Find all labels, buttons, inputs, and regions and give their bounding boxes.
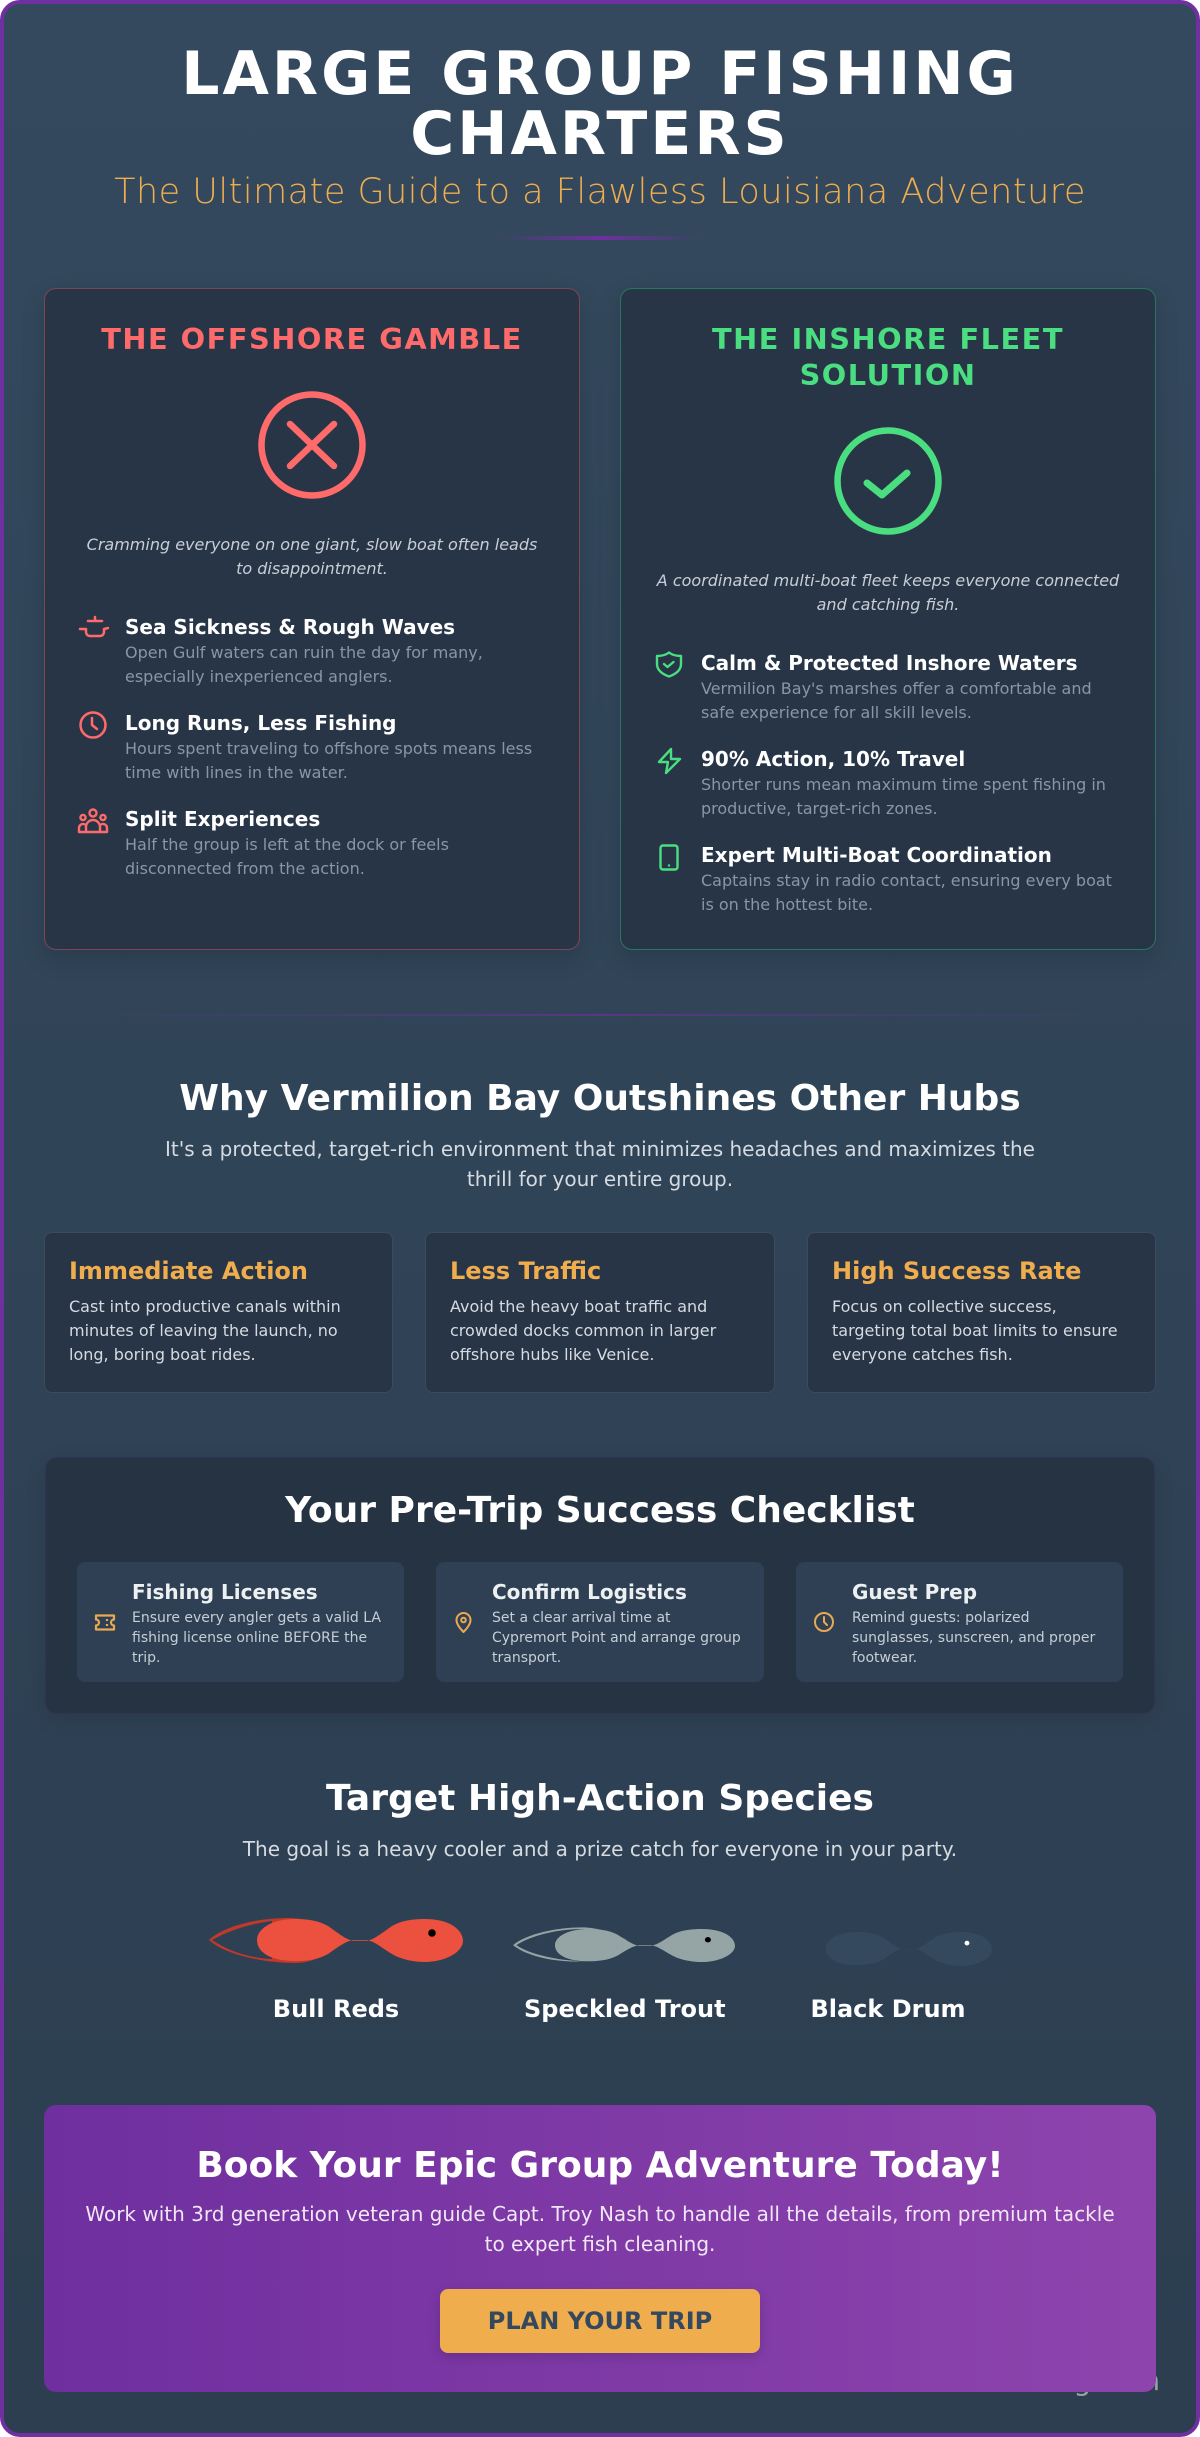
item: calm waters [656, 651, 1092, 722]
item text [701, 870, 1112, 914]
item text [125, 834, 449, 878]
benefit card: high success rate [807, 1232, 1156, 1393]
section intro: It's a protected, target-rich environment that minimizes headaches and maximizes the [165, 1137, 1035, 1161]
panel: call to action [44, 2105, 1156, 2392]
benefit text: long, boring boat rides. [69, 1345, 256, 1364]
intro text: A coordinated multi-boat fleet keeps everyone connected [657, 571, 1119, 590]
checklist text: footwear. [852, 1650, 917, 1666]
benefit text [832, 1297, 1118, 1364]
intro text: and catching fish. [817, 595, 959, 614]
cta text: Work with 3rd generation veteran guide Capt. Troy Nash to handle all the details, from premium tackle [85, 2202, 1115, 2226]
checklist text [132, 1610, 381, 1666]
benefit title: High Success Rate [832, 1257, 1081, 1285]
item text: Captains stay in radio contact, ensuring every boat [701, 870, 1112, 890]
icon: phone [659, 844, 679, 871]
checklist card: logistics [436, 1562, 764, 1682]
checklist card: licenses [77, 1562, 404, 1682]
button [440, 2289, 760, 2353]
panel: checklist [45, 1457, 1155, 1714]
benefit title: Immediate Action [69, 1257, 308, 1285]
title [181, 39, 1019, 169]
item title: Expert Multi-Boat Coordination [701, 843, 1052, 867]
benefit text: Avoid the heavy boat traffic and [450, 1297, 707, 1316]
icon: people [78, 808, 108, 834]
item title: Split Experiences [125, 807, 320, 831]
heading: inshore: THE INSHORE FLEET [712, 322, 1064, 356]
item text [125, 738, 532, 782]
checklist text [852, 1610, 1096, 1666]
item title: Calm & Protected Inshore Waters [701, 651, 1078, 675]
item text: Shorter runs mean maximum time spent fishing in [701, 774, 1106, 794]
item: coordination [659, 843, 1112, 914]
species heading: Target High-Action Species [326, 1778, 874, 1819]
checklist text [492, 1610, 741, 1666]
icon: clock [814, 1612, 834, 1632]
item text: Half the group is left at the dock or feels [125, 834, 449, 854]
item text: productive, target-rich zones. [701, 798, 938, 818]
checklist title: Guest Prep [852, 1580, 977, 1604]
checklist text: trip. [132, 1650, 160, 1666]
item title: Long Runs, Less Fishing [125, 711, 396, 735]
icon: pot [78, 616, 110, 638]
benefit text [69, 1297, 341, 1364]
benefit text: Cast into productive canals within [69, 1297, 341, 1316]
intro text: to disappointment. [236, 559, 388, 578]
item text: time with lines in the water. [125, 762, 348, 782]
panel: the inshore fleet solution [620, 288, 1156, 950]
item text: Open Gulf waters can ruin the day for many, [125, 642, 483, 662]
item text [701, 774, 1106, 818]
title: CHARTERS [410, 99, 790, 169]
checklist text: sunglasses, sunscreen, and proper [852, 1630, 1095, 1646]
cta text [85, 2202, 1115, 2256]
partially hidden footer text: Fishing.com [994, 2364, 1160, 2397]
item text: Vermilion Bay's marshes offer a comfortable and [701, 678, 1092, 698]
checklist text: Cypremort Point and arrange group [492, 1630, 741, 1646]
benefit text [450, 1297, 716, 1364]
icon: pin [456, 1612, 472, 1633]
item text [125, 642, 483, 686]
item: sea sickness [78, 615, 483, 686]
item text: Hours spent traveling to offshore spots means less [125, 738, 532, 758]
item text: is on the hottest bite. [701, 894, 873, 914]
species intro: The goal is a heavy cooler and a prize catch for everyone in your party. [243, 1837, 957, 1861]
icon: shield [656, 651, 682, 678]
section heading: vermilion bay: Why Vermilion Bay Outshines Other Hubs [179, 1078, 1021, 1119]
intro text [87, 535, 537, 578]
item: split experiences [78, 807, 449, 878]
benefit card: less traffic [425, 1232, 775, 1393]
benefit text: crowded docks common in larger [450, 1321, 716, 1340]
checklist card: guest prep [796, 1562, 1123, 1682]
species label: speckled trout: Speckled Trout [524, 1995, 726, 2023]
header divider [500, 236, 700, 240]
item text: especially inexperienced anglers. [125, 666, 393, 686]
item text: disconnected from the action. [125, 858, 365, 878]
item text [701, 678, 1092, 722]
checklist heading: Your Pre-Trip Success Checklist [285, 1490, 915, 1531]
checklist text: Remind guests: polarized [852, 1610, 1029, 1626]
benefit title: Less Traffic [450, 1257, 601, 1285]
icon: check in circle [834, 427, 942, 535]
checklist text: Set a clear arrival time at [492, 1610, 671, 1626]
item title: Sea Sickness & Rough Waves [125, 615, 455, 639]
checklist title: Fishing Licenses [132, 1580, 318, 1604]
panel: the offshore gamble [44, 288, 580, 950]
checklist text: transport. [492, 1650, 561, 1666]
benefit card: immediate action [44, 1232, 393, 1393]
heading: offshore: THE OFFSHORE GAMBLE [101, 322, 523, 356]
icon: clock [79, 711, 107, 739]
checklist text: fishing license online BEFORE the [132, 1630, 367, 1646]
icon: bolt [658, 748, 682, 774]
species label: bull reds: Bull Reds [273, 1995, 399, 2023]
heading: inshore: SOLUTION [800, 358, 976, 392]
item: action [658, 747, 1106, 818]
benefit text: minutes of leaving the launch, no [69, 1321, 338, 1340]
benefit text: targeting total boat limits to ensure [832, 1321, 1118, 1340]
item: long runs [79, 711, 532, 782]
button: PLAN YOUR TRIP [488, 2307, 712, 2335]
intro text [656, 571, 1120, 614]
cta text: to expert fish cleaning. [485, 2232, 715, 2256]
item title: 90% Action, 10% Travel [701, 747, 965, 771]
intro text: Cramming everyone on one giant, slow boat often leads [87, 535, 537, 554]
section intro: thrill for your entire group. [467, 1166, 733, 1190]
checklist text: Ensure every angler gets a valid LA [132, 1610, 381, 1626]
subtitle: The Ultimate Guide to a Flawless Louisiana Adventure [114, 172, 1086, 212]
section intro [165, 1137, 1035, 1190]
benefit text: everyone catches fish. [832, 1345, 1013, 1364]
icon: x in circle [258, 391, 366, 499]
benefit text: offshore hubs like Venice. [450, 1345, 654, 1364]
section divider [60, 1014, 1140, 1016]
heading: inshore [712, 322, 1064, 392]
item text: safe experience for all skill levels. [701, 702, 972, 722]
icon: ticket [94, 1614, 116, 1631]
checklist title: Confirm Logistics [492, 1580, 687, 1604]
benefit text: Focus on collective success, [832, 1297, 1057, 1316]
species label: black drum: Black Drum [810, 1995, 966, 2023]
title: LARGE GROUP FISHING [181, 39, 1019, 109]
cta heading: Book Your Epic Group Adventure Today! [196, 2145, 1004, 2186]
